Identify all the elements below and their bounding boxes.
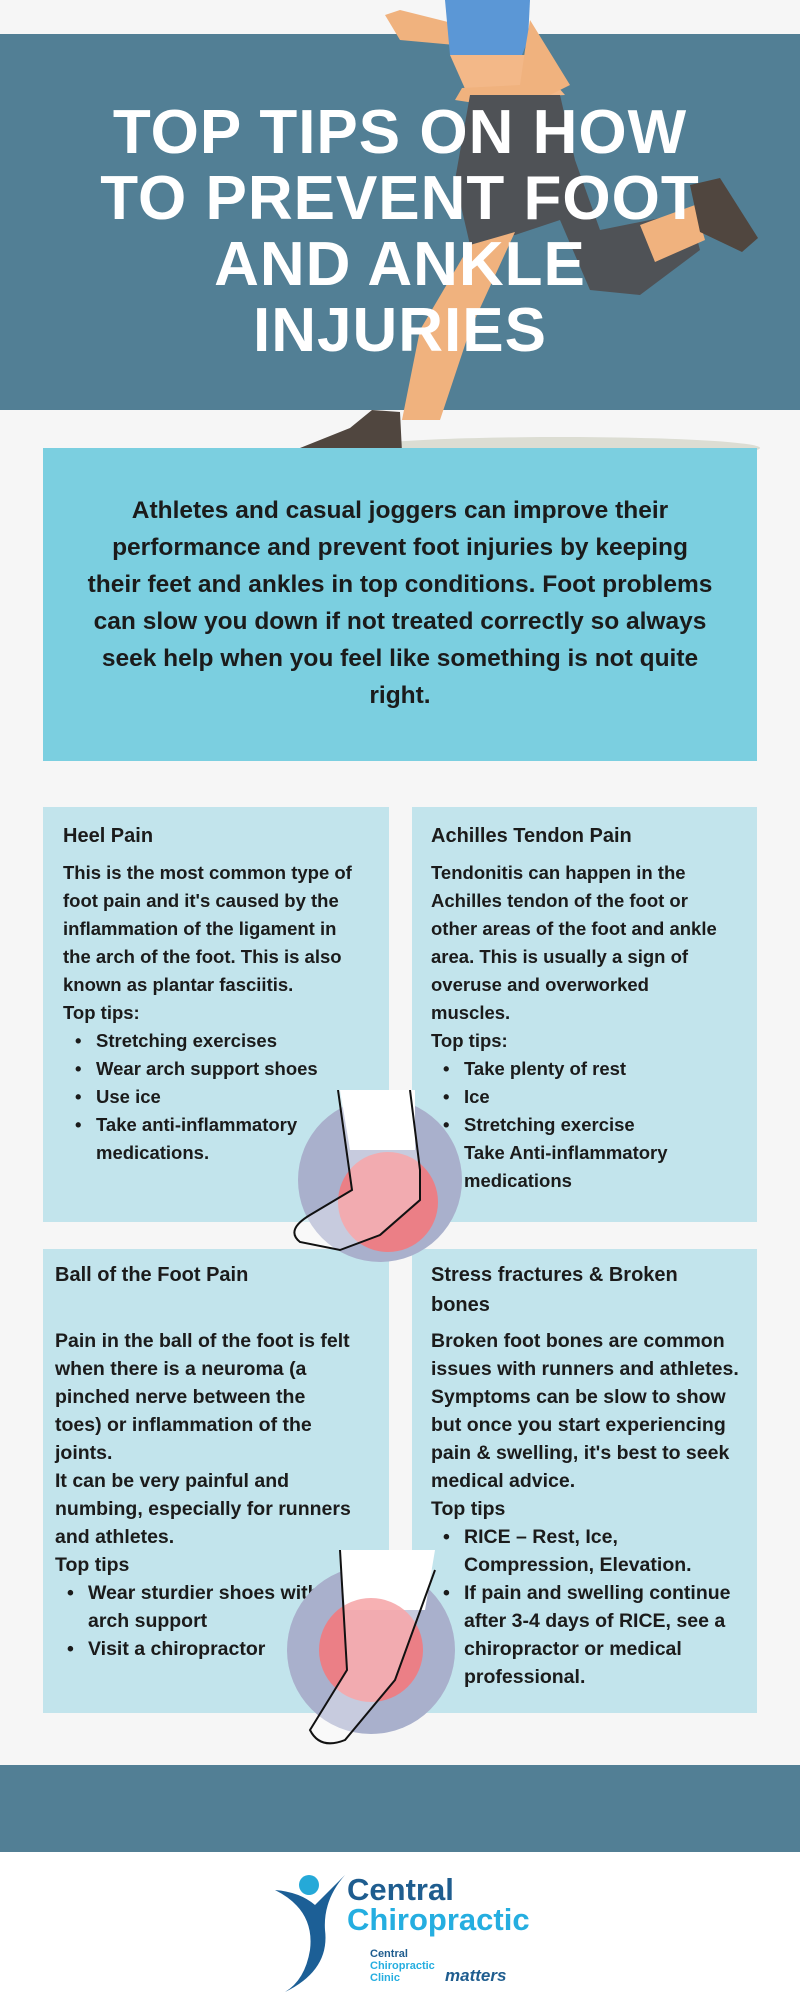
panel: achilles: Take plenty of rest: [464, 1058, 626, 1079]
header banner: [0, 34, 800, 410]
icon: ball of foot: [287, 1550, 455, 1744]
panel: ball of foot: It can be very painful and: [55, 1470, 289, 1492]
panel: stress fractures: chiropractor or medical: [464, 1638, 682, 1660]
panel: achilles: Achilles tendon of the foot or: [431, 890, 688, 911]
panel: ball of foot: Ball of the Foot Pain: [55, 1264, 248, 1286]
panel: stress fractures: pain & swelling, it's best to seek: [431, 1442, 729, 1464]
panel: stress fractures: but once you start experiencing: [431, 1414, 726, 1436]
footer banner: [0, 1765, 800, 1852]
panel: heel pain: known as plantar fasciitis.: [63, 974, 293, 995]
intro text: seek help when you feel like something is not quite: [102, 645, 698, 672]
panel: achilles: Top tips:: [431, 1030, 508, 1051]
panel: heel pain: medications.: [96, 1142, 209, 1163]
panel: heel pain: Take anti-inflammatory: [96, 1114, 297, 1135]
panel: ball of foot: Top tips: [55, 1554, 129, 1576]
panel: ball of foot: joints.: [55, 1442, 112, 1464]
footer logo area: [0, 1852, 800, 2000]
panel: stress fractures: Compression, Elevation.: [464, 1554, 692, 1576]
icon: heel foot: [293, 1090, 462, 1262]
panel: achilles: [412, 807, 757, 1222]
panel: ball of foot: Pain in the ball of the foot is felt: [55, 1330, 350, 1352]
panel: ball of foot: and athletes.: [55, 1526, 174, 1548]
title: TO PREVENT FOOT: [100, 164, 700, 233]
logo: matters: [445, 1966, 506, 1985]
panel: stress fractures: RICE – Rest, Ice,: [464, 1526, 618, 1548]
panel: achilles: area. This is usually a sign of: [431, 946, 688, 967]
panel: heel pain: Use ice: [96, 1086, 161, 1107]
panel: stress fractures: after 3-4 days of RICE, see a: [464, 1610, 725, 1632]
panel: ball of foot: pinched nerve between the: [55, 1386, 305, 1408]
logo: Chiropractic: [347, 1902, 530, 1937]
title: [100, 98, 700, 365]
title: AND ANKLE: [214, 230, 586, 299]
panel: ball of foot: Wear sturdier shoes with: [88, 1582, 320, 1604]
panel: stress fractures: Stress fractures & Broken: [431, 1264, 678, 1286]
intro text: [88, 497, 712, 709]
panel: heel pain: inflammation of the ligament in: [63, 918, 336, 939]
panel: ball of foot: [43, 1249, 389, 1713]
panel: heel pain: Top tips:: [63, 1002, 140, 1023]
logo: [275, 1872, 530, 1992]
panel: achilles: Take Anti-inflammatory: [464, 1142, 668, 1163]
panel: heel pain: Stretching exercises: [96, 1030, 277, 1051]
panel: heel pain: [43, 807, 389, 1222]
panel: stress fractures: bones: [431, 1294, 490, 1316]
panel: achilles: medications: [464, 1170, 572, 1191]
panel: stress fractures: Top tips: [431, 1498, 505, 1520]
panel: heel pain: Heel Pain: [63, 825, 153, 847]
panel: achilles: Stretching exercise: [464, 1114, 635, 1135]
panel: achilles: Achilles Tendon Pain: [431, 825, 632, 847]
logo: Clinic: [370, 1972, 400, 1984]
panel: stress fractures: If pain and swelling continue: [464, 1582, 731, 1604]
panel: stress fractures: Broken foot bones are common: [431, 1330, 725, 1352]
panel: achilles: Tendonitis can happen in the: [431, 862, 686, 883]
panel: ball of foot: arch support: [88, 1610, 207, 1632]
panel: heel pain: the arch of the foot. This is also: [63, 946, 342, 967]
intro text: performance and prevent foot injuries by keeping: [112, 534, 688, 561]
intro text: right.: [369, 682, 431, 709]
title: INJURIES: [253, 296, 547, 365]
panel: achilles: overuse and overworked: [431, 974, 649, 995]
panel: heel pain: foot pain and it's caused by the: [63, 890, 339, 911]
panel: stress fractures: [412, 1249, 757, 1713]
panel: stress fractures: medical advice.: [431, 1470, 575, 1492]
panel: stress fractures: Symptoms can be slow to show: [431, 1386, 726, 1408]
intro text: their feet and ankles in top conditions. Foot problems: [88, 571, 712, 598]
logo: Central: [347, 1872, 454, 1907]
panel: ball of foot: toes) or inflammation of the: [55, 1414, 312, 1436]
panel: achilles: Ice: [464, 1086, 490, 1107]
logo: Chiropractic: [370, 1960, 435, 1972]
intro text: Athletes and casual joggers can improve their: [132, 497, 668, 524]
panel: heel pain: This is the most common type of: [63, 862, 352, 883]
panel: stress fractures: professional.: [464, 1666, 585, 1688]
panel: ball of foot: Visit a chiropractor: [88, 1638, 265, 1660]
panel: achilles: muscles.: [431, 1002, 510, 1023]
panel: stress fractures: issues with runners and athletes.: [431, 1358, 739, 1380]
runner illustration: [300, 0, 760, 450]
panel: heel pain: Wear arch support shoes: [96, 1058, 318, 1079]
intro box: [43, 448, 757, 761]
intro text: can slow you down if not treated correctly so always: [94, 608, 706, 635]
panel: ball of foot: numbing, especially for runners: [55, 1498, 351, 1520]
panel: ball of foot: when there is a neuroma (a: [55, 1358, 306, 1380]
panel: achilles: other areas of the foot and ankle: [431, 918, 717, 939]
logo: Central: [370, 1948, 408, 1960]
title: TOP TIPS ON HOW: [113, 98, 687, 167]
